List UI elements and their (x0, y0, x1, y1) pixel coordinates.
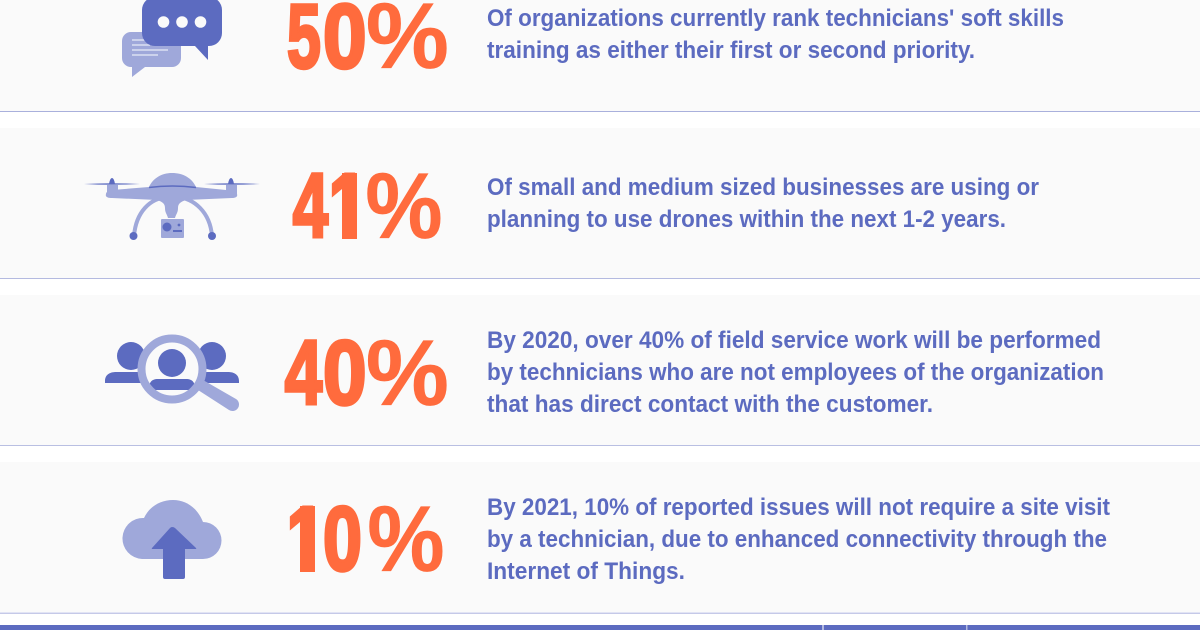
panel: drones (0, 172, 1200, 279)
text: contractors: By 2020, over 40% of field service work will be performed (487, 327, 1101, 354)
text: soft skills: Of organizations currently rank technicians' soft skills (487, 5, 1064, 32)
panel: soft skills (0, 0, 1200, 112)
stat: 10%: 1 (286, 489, 324, 590)
stat: 40%: 4 (285, 322, 323, 423)
text: soft skills: training as either their first or second priority. (487, 37, 975, 64)
stat: 41%: 1 (328, 156, 366, 257)
stat: 41% (292, 172, 440, 239)
text: contractors: that has direct contact with the customer. (487, 391, 933, 418)
text: soft skills (487, 5, 1064, 64)
stat: 41%: % (366, 155, 442, 259)
text: contractors: by technicians who are not employees of the organization (487, 359, 1104, 386)
text: internet of things: By 2021, 10% of reported issues will not require a site visit (487, 494, 1110, 521)
icon: drone (84, 173, 260, 240)
panel: internet of things (0, 498, 1200, 614)
text: internet of things: Internet of Things. (487, 558, 685, 585)
text: drones: planning to use drones within the next 1-2 years. (487, 206, 1006, 233)
icon: cloud upload (122, 500, 222, 579)
text: drones: Of small and medium sized businesses are using or (487, 174, 1039, 201)
footer bar (0, 625, 1200, 630)
stat: 41%: 4 (293, 155, 328, 257)
stat: 50% (287, 0, 449, 88)
stat: 10% (290, 504, 442, 573)
icon: chat bubbles (122, 0, 222, 77)
stat: 10%: 0 (323, 488, 362, 590)
stat: 40%: 0 (323, 321, 367, 423)
icon: people and magnifier (105, 338, 239, 411)
stat: 40% (285, 321, 449, 425)
text: contractors (487, 327, 1104, 418)
text: internet of things (487, 494, 1110, 585)
text: drones (487, 174, 1039, 233)
stat: 40%: % (366, 321, 449, 425)
text: internet of things: by a technician, due to enhanced connectivity through the (487, 526, 1107, 553)
panel: contractors (0, 295, 1200, 446)
stat: 10%: % (368, 488, 444, 592)
